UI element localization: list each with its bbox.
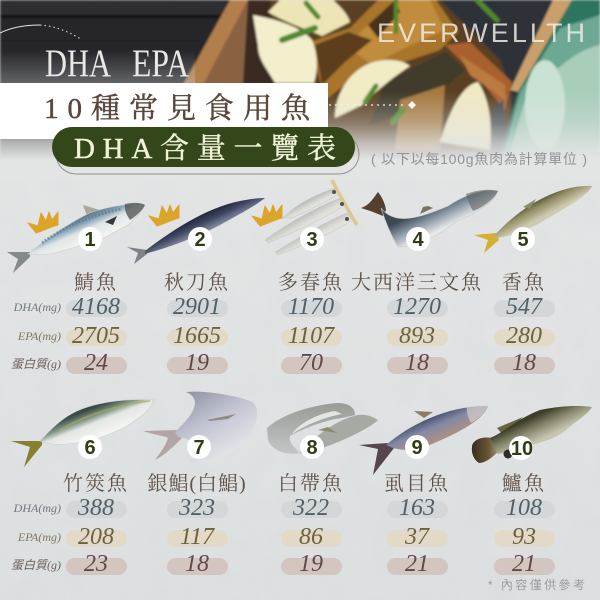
badge 8: 8 <box>306 437 318 459</box>
fish 10: sea bass <box>472 406 592 463</box>
column 5 data: 香魚 <box>494 271 555 376</box>
column 7 data: 銀鯧(白鯧): 銀鯧(白鯧) <box>147 472 247 495</box>
column 10 data: 鱸魚: 93 <box>512 524 536 550</box>
badge 10: 10 <box>511 438 533 460</box>
column 2 data: 秋刀魚: 2901 <box>173 294 221 320</box>
column 4 data: 大西洋三文魚: 18 <box>405 350 429 376</box>
column 3 data: 多春魚: 1107 <box>288 323 335 349</box>
column 3 data: 多春魚: 70 <box>299 350 323 376</box>
brand name: EVERWELLTH: EVERWELLTH <box>377 18 585 48</box>
column 3 data: 多春魚: 多春魚 <box>278 271 344 294</box>
column 2 data: 秋刀魚: 1665 <box>173 323 221 349</box>
title banner: white band <box>0 83 328 139</box>
row labels top: 蛋白質(g) <box>11 357 61 371</box>
footnote: * 內容僅供參考 <box>488 577 585 592</box>
column 1 data: 鯖魚: 2705 <box>72 323 120 349</box>
column 9 data: 虱目魚 <box>384 472 450 577</box>
column 9 data: 虱目魚: 163 <box>399 495 435 521</box>
decorative label: DHA EPA: DHA <box>45 42 111 85</box>
column 6 data: 竹筴魚: 208 <box>78 524 114 550</box>
unit note: ( 以下以每100g魚肉為計算單位 ) <box>371 151 587 167</box>
decorative label: DHA EPA: EPA <box>132 42 189 85</box>
column 1 data: 鯖魚: 鯖魚 <box>74 271 118 294</box>
column 4 data: 大西洋三文魚: 1270 <box>393 294 441 320</box>
column 7 data: 銀鯧(白鯧): 117 <box>180 524 215 550</box>
badge 5: 5 <box>517 229 529 251</box>
fish 1: mackerel <box>7 203 145 273</box>
fish 6: yellowtail scad <box>11 400 154 467</box>
crown 3 <box>252 205 282 226</box>
column 1 data: 鯖魚: 4168 <box>72 294 120 320</box>
column 8 data: 白帶魚 <box>278 472 344 577</box>
decorative label: DHA EPA <box>45 42 189 85</box>
title pill <box>52 127 359 174</box>
column 10 data: 鱸魚 <box>494 472 555 577</box>
column 4 data: 大西洋三文魚: 893 <box>399 323 435 349</box>
badge 7: 7 <box>193 437 205 459</box>
column 10 data: 鱸魚: 鱸魚 <box>502 472 546 495</box>
fish 2: saury <box>127 198 265 264</box>
decorative arc line <box>0 25 82 40</box>
column 6 data: 竹筴魚: 竹筴魚 <box>63 472 129 495</box>
column 2 data: 秋刀魚: 秋刀魚 <box>164 271 230 294</box>
badge 2: 2 <box>194 229 206 251</box>
badge 6 <box>78 435 102 459</box>
column 8 data: 白帶魚: 白帶魚 <box>278 472 344 495</box>
column 9 data: 虱目魚: 37 <box>404 524 430 550</box>
column 8 data: 白帶魚: 86 <box>299 524 323 550</box>
column 7 data: 銀鯧(白鯧): 323 <box>178 495 215 521</box>
column 8 data: 白帶魚: 19 <box>299 551 323 577</box>
title line 1: 10種常見食用魚 <box>44 92 311 125</box>
crown 2 <box>149 205 179 226</box>
column 6 data: 竹筴魚: 23 <box>84 551 108 577</box>
column 5 data: 香魚: 18 <box>512 350 536 376</box>
column 8 data: 白帶魚: 322 <box>292 495 329 521</box>
column 2 data: 秋刀魚: 19 <box>185 350 209 376</box>
column 5 data: 香魚: 香魚 <box>502 271 546 294</box>
column 2 data: 秋刀魚 <box>164 271 230 376</box>
fish 3: capelin group <box>252 180 357 255</box>
badge 6: 6 <box>84 437 96 459</box>
column 4 data: 大西洋三文魚 <box>351 271 483 376</box>
column 3 data: 多春魚 <box>278 271 344 376</box>
column 3 data: 多春魚: 1170 <box>288 294 334 320</box>
row labels bottom: DHA(mg) <box>13 501 61 515</box>
fish 5: sweetfish <box>474 186 592 253</box>
crown 1 <box>28 212 58 233</box>
column 6 data: 竹筴魚 <box>63 472 129 577</box>
row labels bottom <box>11 501 61 572</box>
badge 3: 3 <box>306 229 318 251</box>
column 6 data: 竹筴魚: 388 <box>77 495 114 521</box>
header food photo <box>0 0 600 180</box>
row labels bottom: 蛋白質(g) <box>11 558 61 572</box>
column 10 data: 鱸魚: 108 <box>506 495 542 521</box>
column 1 data: 鯖魚 <box>66 271 127 376</box>
title line 2: DHA含量一覽表 <box>74 132 336 165</box>
column 5 data: 香魚: 547 <box>506 294 543 320</box>
fish 9: milkfish <box>359 405 488 475</box>
column 9 data: 虱目魚: 虱目魚 <box>384 472 450 495</box>
badge 4: 4 <box>412 229 424 251</box>
badge 9: 9 <box>411 437 423 459</box>
row labels top: DHA(mg) <box>13 300 61 314</box>
column 5 data: 香魚: 280 <box>506 323 542 349</box>
fish 4: atlantic salmon <box>361 190 498 251</box>
column 1 data: 鯖魚: 24 <box>84 350 108 376</box>
row labels top: EPA(mg) <box>17 329 61 343</box>
fish 7: silver pomfret <box>143 392 257 462</box>
column 4 data: 大西洋三文魚: 大西洋三文魚 <box>351 271 483 294</box>
row labels top <box>11 300 61 371</box>
fish 8: hairtail <box>267 403 378 459</box>
column 7 data: 銀鯧(白鯧): 18 <box>185 551 209 577</box>
column 7 data: 銀鯧(白鯧) <box>147 472 247 577</box>
column 10 data: 鱸魚: 21 <box>512 551 536 577</box>
column 9 data: 虱目魚: 21 <box>405 551 429 577</box>
dotted line with diamond <box>329 101 416 109</box>
badge 1: 1 <box>84 229 96 251</box>
row labels bottom: EPA(mg) <box>17 530 61 544</box>
